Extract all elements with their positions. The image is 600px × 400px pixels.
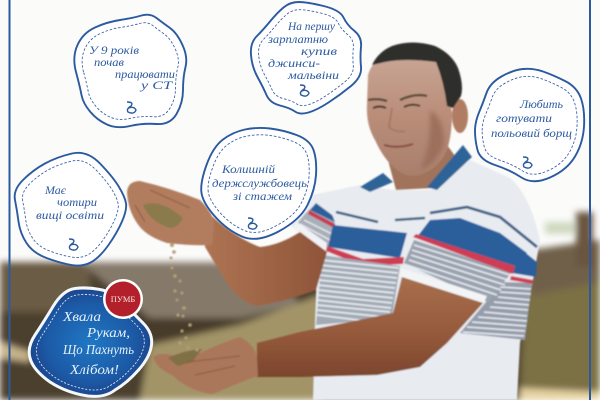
speech bubble: age nine: у СТ (140, 78, 174, 92)
speech bubble: age nine: працювати (115, 67, 175, 81)
speech bubble: age nine (74, 15, 186, 127)
left arm (205, 210, 327, 306)
speech bubble: four degrees: Має (44, 183, 67, 197)
ear (452, 99, 468, 133)
badge: slogan (29, 288, 152, 396)
logo: ПУМБ red circle: ПУМБ (111, 294, 135, 304)
shirt chest stripes (316, 212, 425, 325)
background: blurred barn and grain pile (0, 212, 600, 400)
right arm (257, 277, 483, 377)
speech bubble: former civil servant: держслужбовець (212, 176, 308, 190)
eyes (373, 105, 420, 108)
speech bubble: former civil servant: Колишній (221, 162, 275, 176)
collar (360, 145, 472, 192)
speech bubble: first salary: джинси- (268, 56, 320, 70)
nose shadow (389, 108, 405, 132)
badge: slogan: Рукам, (86, 326, 130, 341)
speech bubble: former civil servant (201, 128, 316, 239)
speech bubble: age nine: У 9 років (89, 43, 139, 57)
speech bubble: four degrees: вищі освіти (36, 208, 104, 222)
photo: farmer with grain (127, 42, 540, 400)
brows (368, 95, 427, 101)
speech bubble: four degrees (15, 153, 126, 266)
speech bubble: field borscht (475, 69, 584, 181)
cheek shadow (420, 110, 444, 170)
falling grain stream (170, 243, 198, 352)
speech bubble: four degrees: чотири (57, 195, 97, 209)
badge: slogan: Хвала (62, 310, 101, 325)
shirt body (290, 160, 540, 400)
right sleeve stripes (400, 207, 537, 305)
speech bubble: age nine: почав (94, 55, 124, 69)
shirt right side stripes (460, 250, 537, 340)
speech bubble: first salary: зарплатню (267, 32, 329, 46)
badge: slogan: Що Пахнуть (62, 343, 134, 358)
lower hand holding grain (153, 337, 258, 394)
hair (372, 42, 462, 108)
speech bubble: field borscht: готувати (496, 111, 552, 125)
logo: ПУМБ red circle (103, 279, 143, 319)
upper hand pouring grain (127, 181, 214, 245)
speech bubble: former civil servant: зі стажем (232, 189, 292, 203)
badge: slogan: Хлібом! (69, 363, 119, 378)
mouth (384, 144, 413, 147)
frame: right blue line (589, 0, 591, 400)
frame: left blue line (8, 0, 10, 400)
speech bubble: first salary: На першу (287, 19, 336, 33)
speech bubble: first salary: купив (301, 44, 337, 58)
background: white wall (0, 0, 600, 262)
neck (388, 145, 458, 190)
speech bubble: field borscht: Любить (519, 97, 564, 111)
speech bubble: first salary (251, 2, 361, 114)
face (367, 56, 452, 176)
shirt left sleeve stripes (298, 202, 336, 247)
speech bubble: first salary: мальвіни (287, 68, 339, 82)
speech bubble: field borscht: польовий борщ (491, 126, 572, 140)
